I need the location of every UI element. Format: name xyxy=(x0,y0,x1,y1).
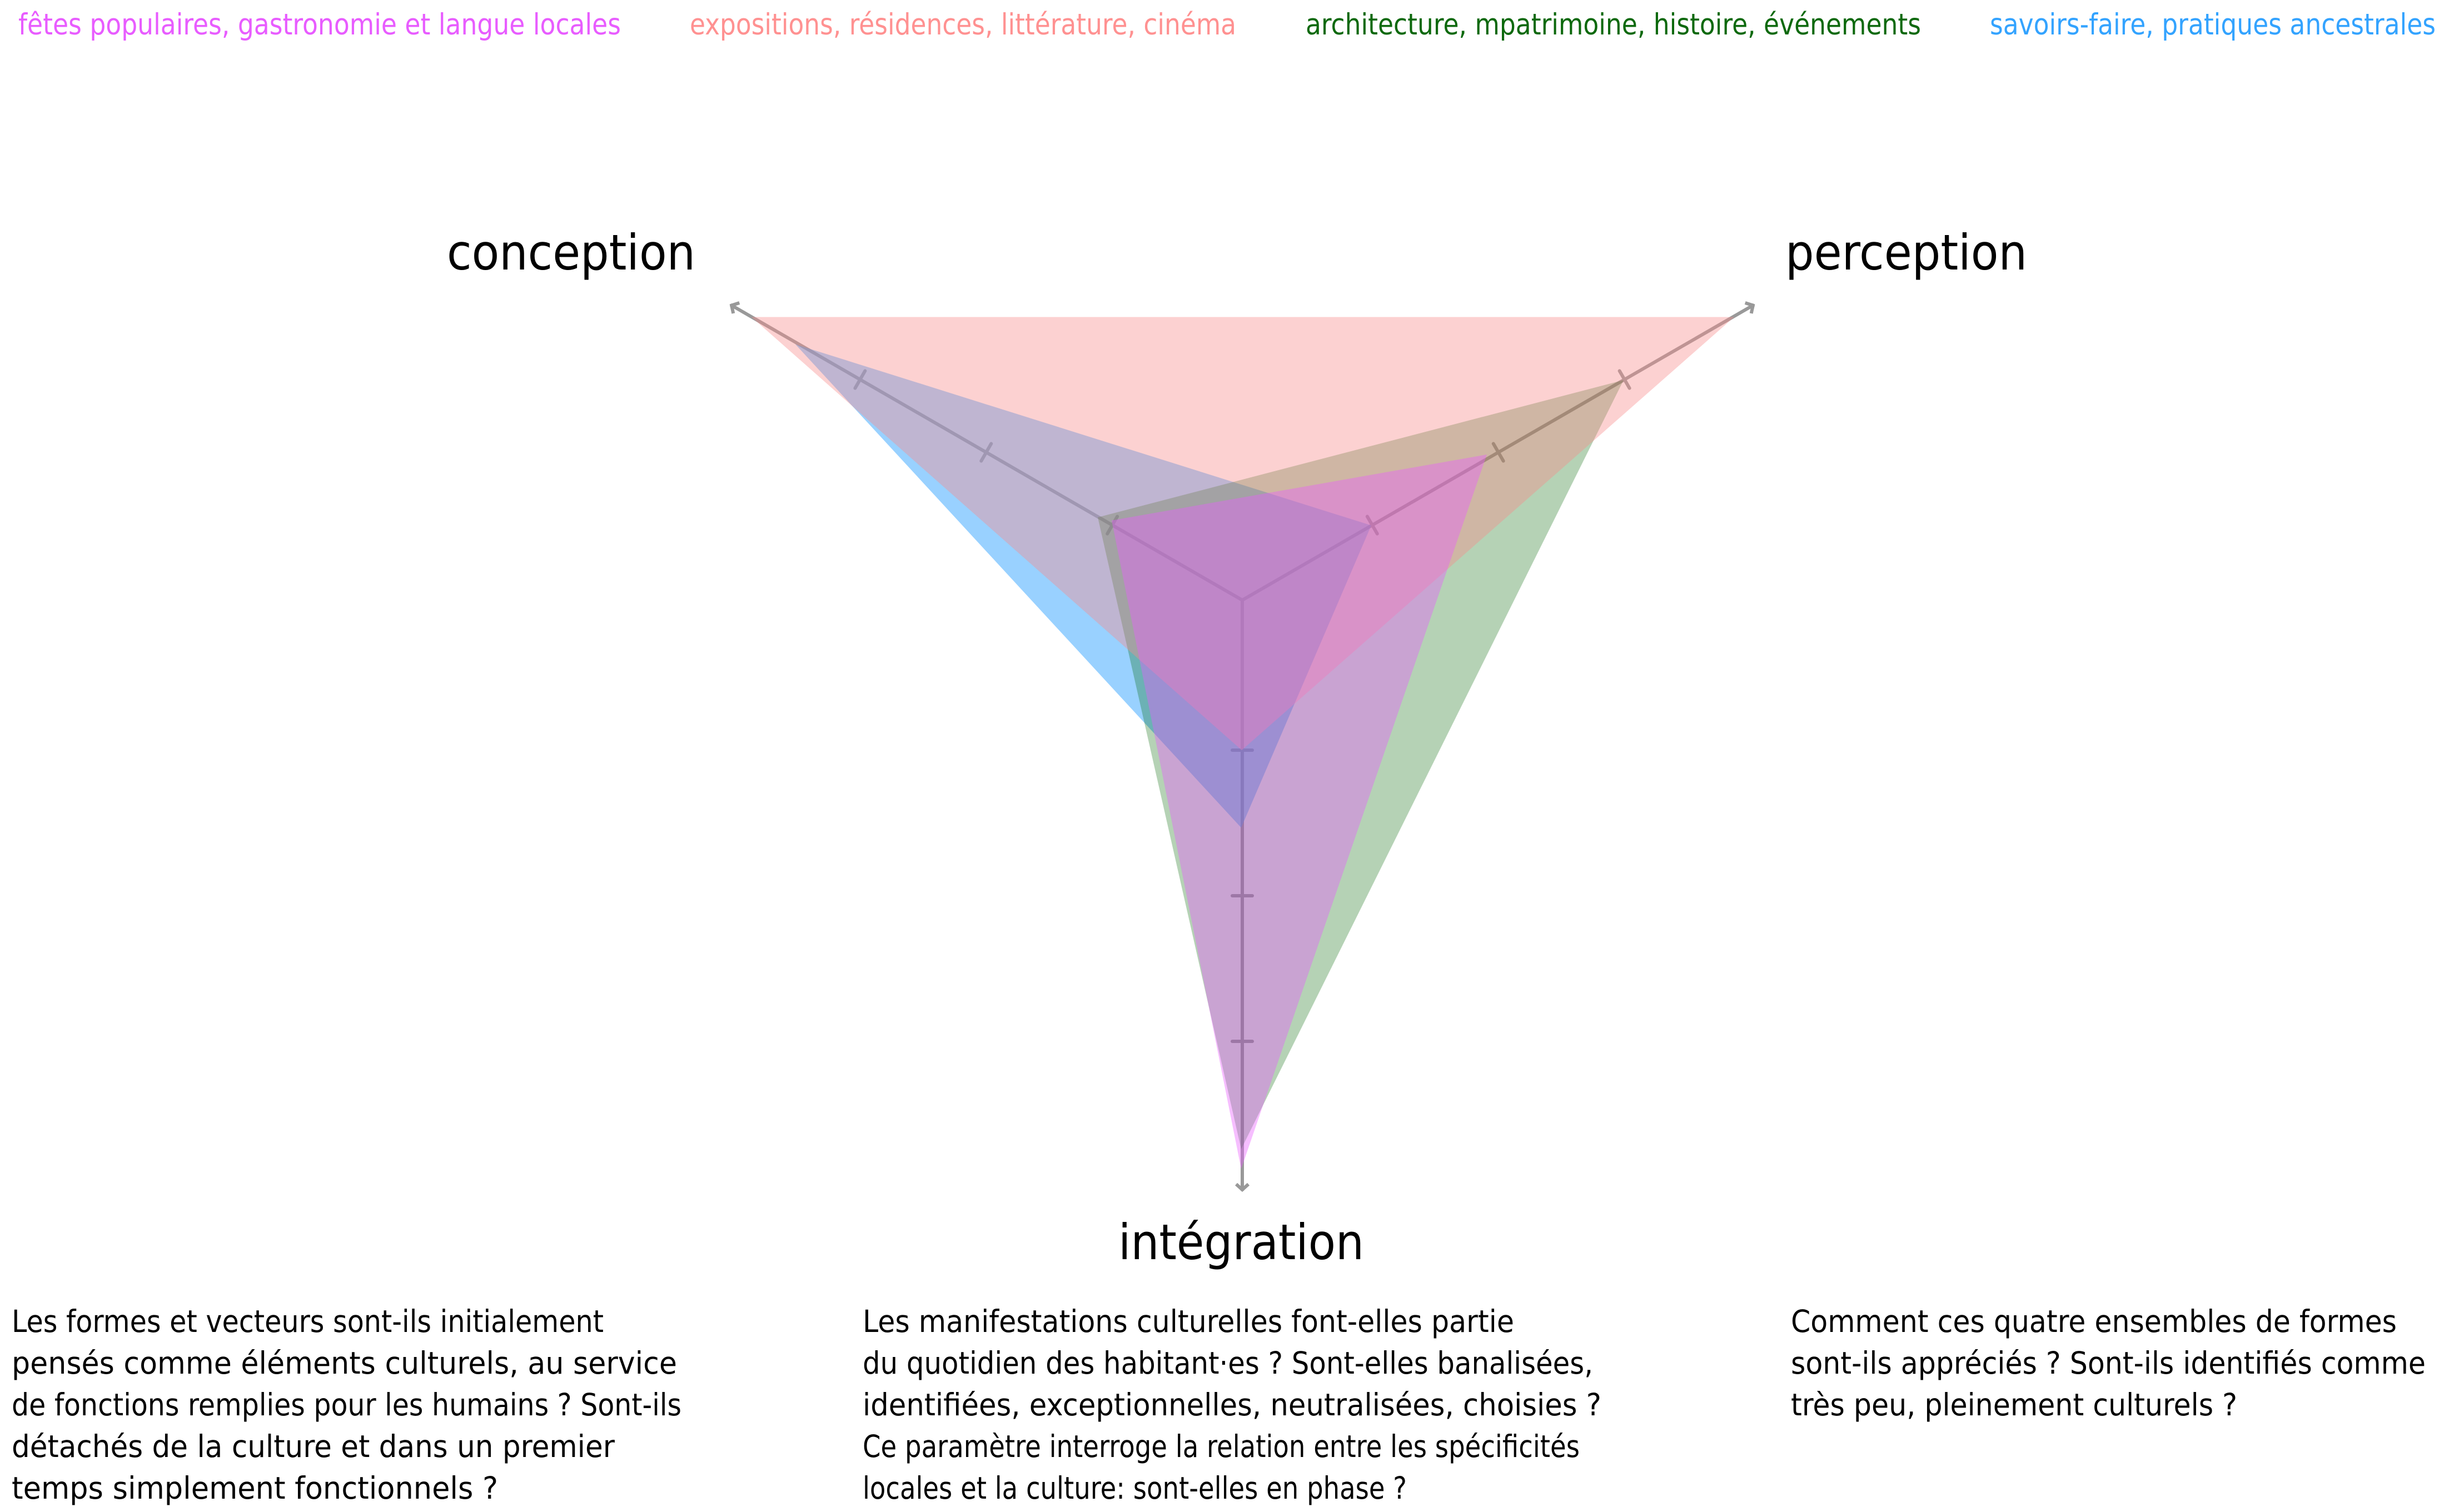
heading: perception: perception xyxy=(1785,224,2027,281)
text block: intégration question: du quotidien des habitant·es ? Sont-elles banalisées, xyxy=(863,1345,1593,1381)
axis: perception xyxy=(1237,296,1759,609)
radar chart xyxy=(725,296,1759,1191)
legend item: fêtes populaires: fêtes populaires, gastronomie et langue locales xyxy=(18,8,621,42)
heading: intégration: intégration xyxy=(1118,1214,1364,1271)
text block: conception question: détachés de la culture et dans un premier xyxy=(12,1429,615,1464)
text block: conception question: pensés comme éléments culturels, au service xyxy=(12,1345,677,1381)
series: fêtes populaires (magenta) xyxy=(1112,455,1487,1169)
legend item: architecture: architecture, mpatrimoine, histoire, événements xyxy=(1306,8,1921,42)
text block: intégration question: Ce paramètre interroge la relation entre les spécificités xyxy=(863,1429,1580,1464)
text block: conception question: temps simplement fonctionnels ? xyxy=(12,1470,498,1506)
text block: intégration question: identifiées, exceptionnelles, neutralisées, choisies ? xyxy=(863,1387,1601,1423)
axis: intégration xyxy=(1232,600,1252,1191)
heading: conception: conception xyxy=(447,224,695,281)
series: expositions (salmon) xyxy=(751,317,1734,750)
text block: conception question: Les formes et vecteurs sont-ils initialement xyxy=(12,1304,604,1339)
text block: conception question: de fonctions remplies pour les humains ? Sont-ils xyxy=(12,1387,681,1423)
legend item: savoirs-faire: savoirs-faire, pratiques ancestrales xyxy=(1990,8,2436,42)
text block: intégration question: locales et la culture: sont-elles en phase ? xyxy=(863,1470,1407,1506)
text block: perception question: sont-ils appréciés ? Sont-ils identifiés comme xyxy=(1791,1345,2426,1381)
text block: perception question: très peu, pleinement culturels ? xyxy=(1791,1387,2237,1423)
series: savoirs-faire (blue) xyxy=(795,345,1371,828)
legend xyxy=(18,8,2436,42)
legend item: expositions: expositions, résidences, littérature, cinéma xyxy=(690,8,1236,42)
axis: conception xyxy=(725,296,1247,609)
text block: perception question: Comment ces quatre ensembles de formes xyxy=(1791,1304,2397,1339)
text block: intégration question: Les manifestations culturelles font-elles partie xyxy=(863,1304,1514,1339)
series: architecture (green) xyxy=(1098,380,1624,1149)
